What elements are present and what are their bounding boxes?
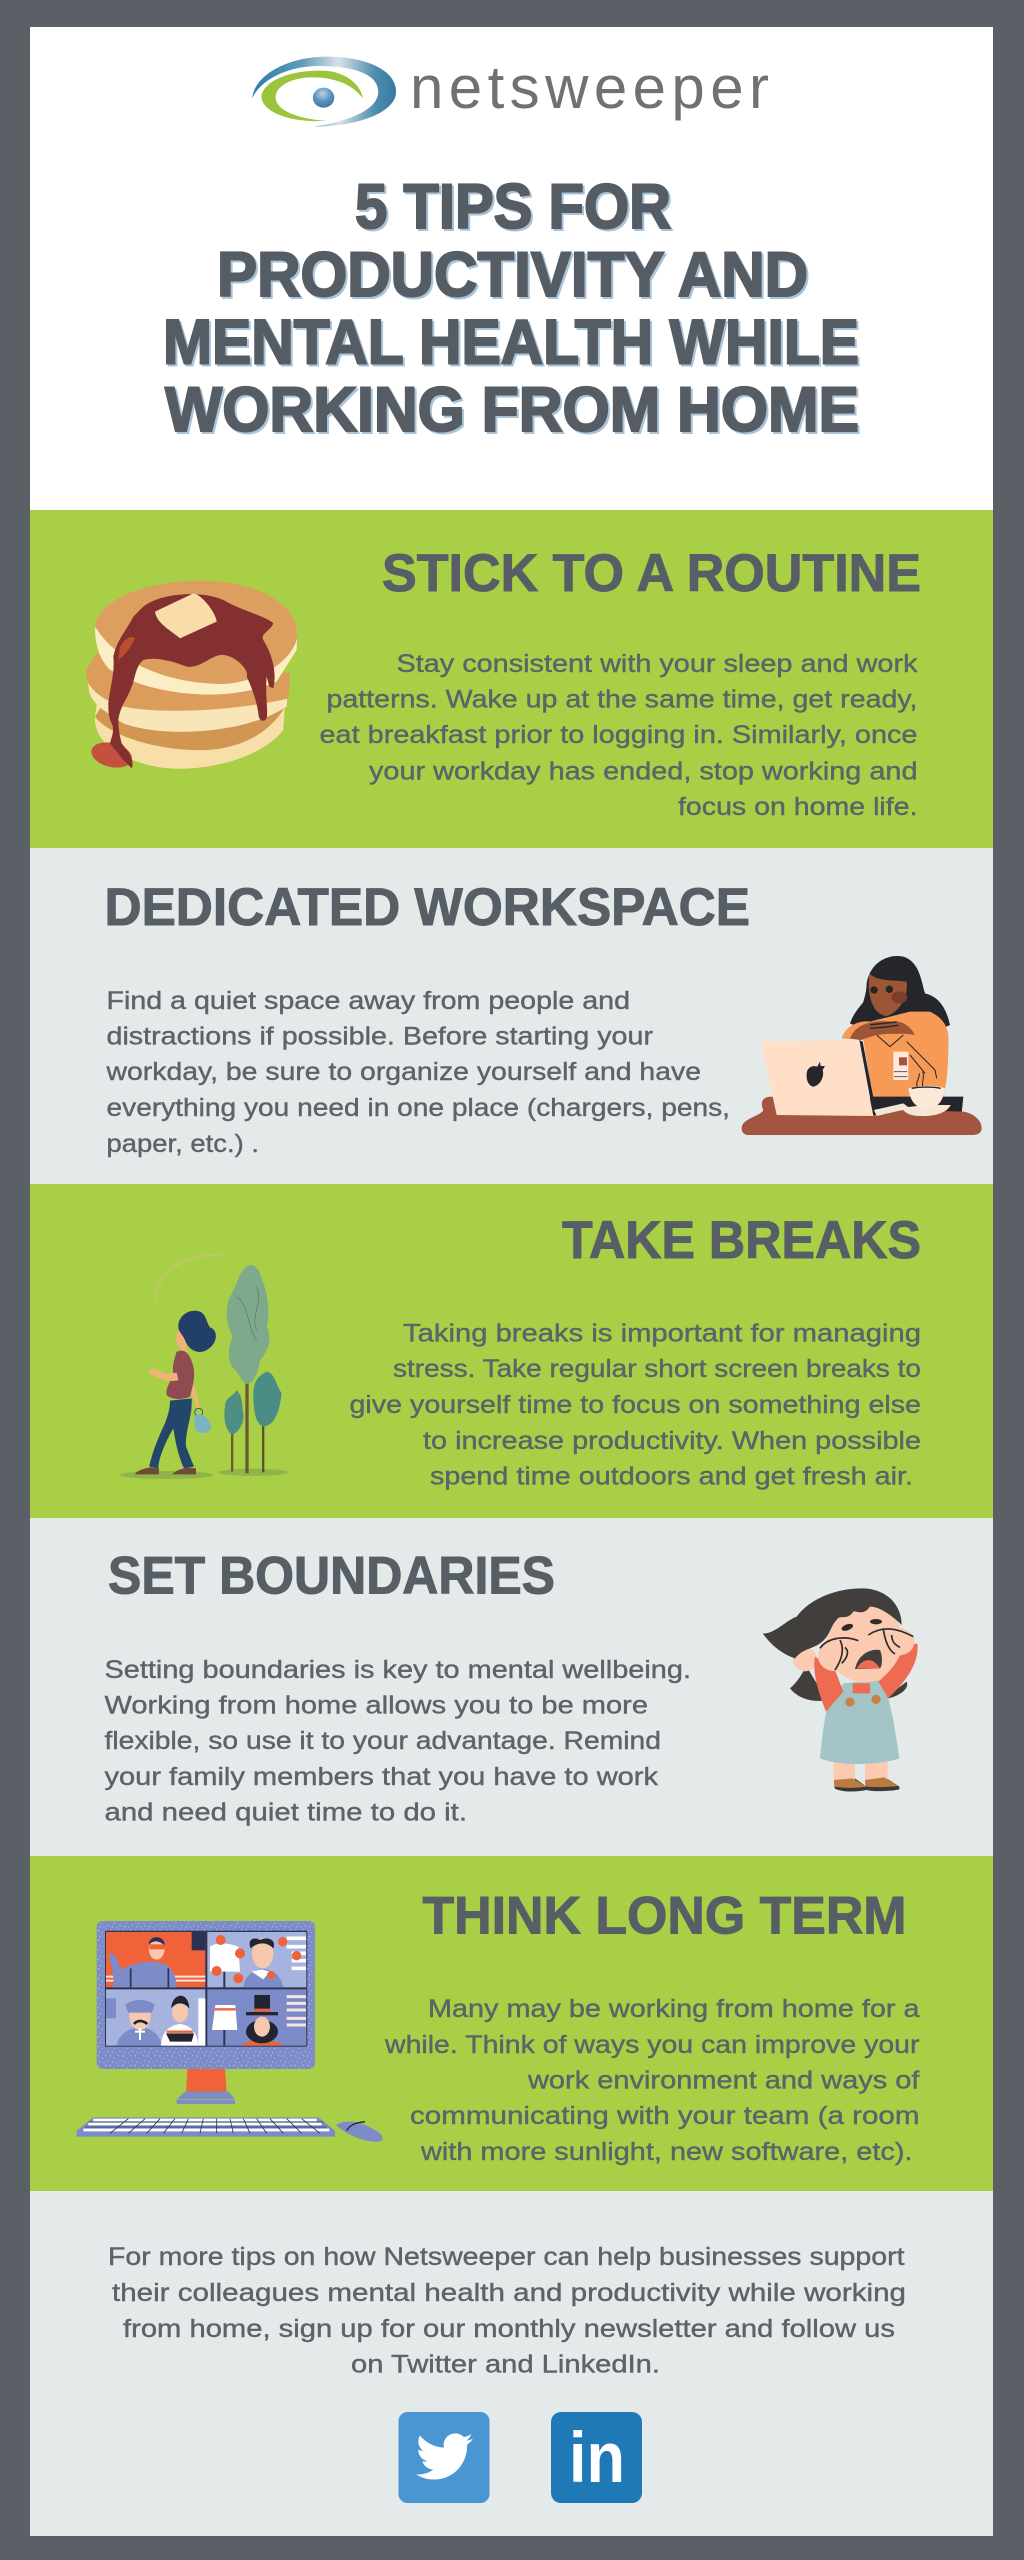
logo: netsweeper: netsweeper	[410, 54, 769, 121]
text block: breaks body	[350, 1320, 921, 1490]
icon: twitter	[398, 2412, 490, 2503]
text block: boundaries body: flexible, so use it to your advantage. Remind	[104, 1727, 661, 1755]
text block: workspace body: everything you need in one place (chargers, pens,	[106, 1094, 730, 1122]
text block: breaks body: give yourself time to focus on something else	[350, 1391, 921, 1419]
icon: crying girl	[763, 1588, 918, 1792]
panel: dedicated workspace	[30, 848, 993, 1184]
icon: netsweeper eye	[252, 57, 396, 127]
text block: footer: from home, sign up for our monthly newsletter and follow us	[123, 2315, 895, 2343]
text block: workspace body: distractions if possible. Before starting your	[106, 1022, 653, 1050]
text block: workspace body: Find a quiet space away from people and	[106, 987, 630, 1015]
text block: workspace body	[105, 987, 730, 1158]
panel: footer call to action	[30, 2191, 993, 2536]
text block: boundaries body: and need quiet time to do it.	[104, 1798, 467, 1826]
text block: breaks body: to increase productivity. When possible	[423, 1427, 921, 1455]
icon: pancakes	[86, 581, 297, 772]
text block: routine body: patterns. Wake up at the same time, get ready,	[326, 686, 918, 714]
text block: routine body: focus on home life.	[678, 793, 918, 821]
text block: routine body: Stay consistent with your sleep and work	[396, 650, 918, 678]
icon: video call on desktop computer	[77, 1921, 383, 2142]
text block: footer	[108, 2243, 906, 2378]
text block: breaks body: spend time outdoors and get fresh air.	[430, 1462, 913, 1490]
text block: footer: their colleagues mental health and productivity while working	[112, 2279, 906, 2307]
text block: footer: For more tips on how Netsweeper can help businesses support	[108, 2243, 905, 2271]
text block: footer: on Twitter and LinkedIn.	[351, 2350, 660, 2378]
text block: routine body: eat breakfast prior to logging in. Similarly, once	[320, 721, 918, 749]
heading: think long term: THINK LONG TERM	[422, 1886, 906, 1946]
text block: routine body	[320, 650, 918, 821]
heading: dedicated workspace: DEDICATED WORKSPACE	[104, 878, 750, 937]
text block: long term body: with more sunlight, new software, etc).	[420, 2138, 912, 2166]
title: PRODUCTIVITY AND	[217, 240, 808, 310]
text block: long term body	[384, 1995, 920, 2166]
title: 5 TIPS FOR	[355, 172, 671, 242]
text block: long term body: Many may be working from home for a	[428, 1995, 920, 2023]
text block: long term body: while. Think of ways you can improve your	[384, 2031, 920, 2059]
text block: boundaries body	[104, 1656, 691, 1826]
panel: think long term	[30, 1856, 993, 2191]
text block: boundaries body: Setting boundaries is key to mental wellbeing.	[104, 1656, 691, 1684]
panel: stick to a routine	[30, 510, 993, 848]
text block: long term body: work environment and ways of	[527, 2066, 920, 2094]
heading: take breaks: TAKE BREAKS	[562, 1211, 921, 1270]
text block: workspace body: workday, be sure to organize yourself and have	[105, 1058, 701, 1086]
icon: linkedin	[551, 2412, 642, 2503]
panel: header	[30, 27, 993, 511]
panel: take breaks	[30, 1184, 993, 1518]
text block: breaks body: Taking breaks is important for managing	[403, 1320, 921, 1348]
title	[163, 172, 859, 445]
icon: person walking among trees	[120, 1255, 288, 1479]
logo: netsweeper	[252, 54, 769, 127]
text block: routine body: your workday has ended, stop working and	[369, 758, 918, 786]
title: WORKING FROM HOME	[165, 375, 859, 445]
icon: linkedin: in	[569, 2419, 625, 2498]
panel: set boundaries	[30, 1518, 993, 1856]
icon: woman at laptop	[742, 956, 982, 1135]
text block: boundaries body: your family members that you have to work	[104, 1763, 659, 1791]
text block: boundaries body: Working from home allows you to be more	[104, 1692, 648, 1720]
text block: workspace body: paper, etc.) .	[106, 1130, 259, 1158]
text block: breaks body: stress. Take regular short screen breaks to	[393, 1355, 921, 1383]
title: MENTAL HEALTH WHILE	[163, 308, 859, 378]
heading: stick to a routine: STICK TO A ROUTINE	[382, 544, 921, 603]
heading: set boundaries: SET BOUNDARIES	[108, 1546, 555, 1606]
text block: long term body: communicating with your team (a room	[410, 2102, 920, 2130]
